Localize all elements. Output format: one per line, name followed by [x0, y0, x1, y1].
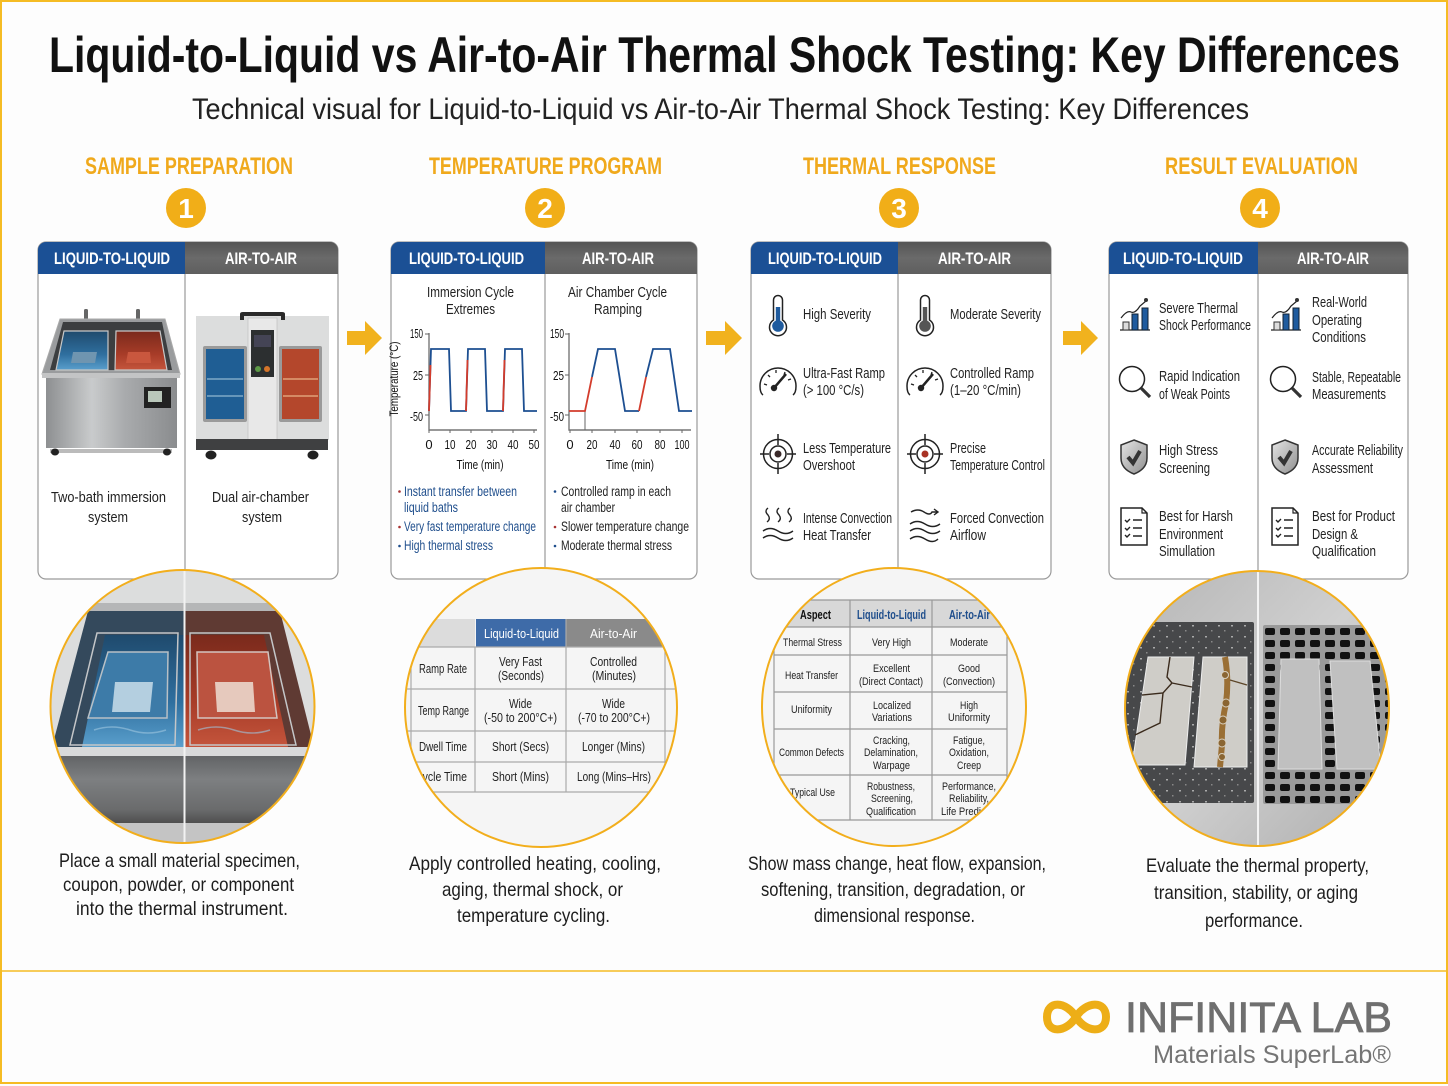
label: precise temperature control: Temperature Control — [950, 458, 1045, 474]
chart title: immersion cycle — [427, 285, 514, 318]
circle: comparison table 2: Screening, — [871, 793, 913, 805]
caption: step 2: aging, thermal shock, or — [442, 879, 623, 901]
chart title: air chamber cycle: Air Chamber Cycle — [568, 285, 667, 301]
label: stable repeatable: Measurements — [1312, 387, 1386, 403]
icon: target overshoot — [760, 434, 796, 474]
label: precise temperature control: Precise — [950, 441, 986, 457]
line chart: air chamber temperature cycle: -50 — [550, 409, 564, 424]
circle: comparison table 1: (-70 to 200°C+) — [578, 711, 650, 725]
label: forced convection — [950, 511, 1044, 544]
header: liquid-to-liquid — [751, 242, 898, 274]
label: real-world operating conditions — [1312, 295, 1367, 346]
circle: comparison table 1: (Seconds) — [498, 669, 544, 683]
header: air-to-air: AIR-TO-AIR — [1297, 250, 1369, 268]
caption: step 1: coupon, powder, or component — [63, 874, 295, 896]
circle: comparison table 2: Typical Use — [790, 787, 835, 799]
label: intense convection: Heat Transfer — [803, 528, 871, 544]
line chart: immersion temperature cycle: 20 — [466, 437, 476, 452]
label: high stress screening — [1159, 443, 1218, 477]
step 1 number badge: 1 — [178, 193, 194, 224]
header: liquid-to-liquid — [38, 242, 185, 274]
label: harsh environment: Environment — [1159, 527, 1223, 543]
step 4 number badge: 4 — [1252, 193, 1268, 224]
line chart: air chamber temperature cycle: 60 — [632, 437, 642, 452]
header: air-to-air — [545, 242, 697, 274]
arrow: step 2 to 3 — [706, 321, 742, 355]
label: ultra-fast ramp: (> 100 °C/s) — [803, 383, 864, 399]
bullets: air-to-air — [554, 484, 689, 553]
caption: step 4: transition, stability, or aging — [1154, 882, 1358, 904]
icon: checklist — [1272, 508, 1298, 545]
line chart: immersion temperature cycle: 40 — [508, 437, 518, 452]
circle: comparison table 1: Wide — [602, 697, 625, 711]
label: moderate severity: Moderate Severity — [950, 307, 1042, 323]
machine captions: Two-bath immersion — [51, 490, 166, 506]
step 4 heading: RESULT EVALUATION — [1165, 153, 1358, 180]
icon: target precise — [907, 434, 943, 474]
label: severe thermal shock performance — [1159, 301, 1251, 334]
caption: step 1: Place a small material specimen, — [59, 850, 300, 872]
line chart: immersion temperature cycle: 150 — [410, 326, 423, 341]
caption: step 4: Evaluate the thermal property, — [1146, 855, 1369, 877]
caption: step 4 — [1146, 855, 1369, 932]
circle: comparison table 2: Moderate — [950, 637, 988, 649]
label: accurate reliability: Assessment — [1312, 461, 1373, 477]
icon: gauge controlled — [907, 368, 943, 395]
step 1 number badge — [166, 188, 206, 228]
line chart: air chamber temperature cycle: 20 — [586, 437, 598, 452]
step 3 heading: THERMAL RESPONSE — [803, 153, 996, 180]
circle: comparison table 1: Liquid-to-Liquid — [484, 627, 559, 641]
circle: comparison table 2: Fatigue, — [953, 735, 985, 747]
circle: comparison table 2: Reliability, — [949, 793, 989, 805]
caption: step 1 — [59, 850, 300, 920]
bullets: liquid-to-liquid — [398, 484, 536, 553]
line chart: immersion temperature cycle: 30 — [486, 437, 498, 452]
line chart: air chamber temperature cycle: 80 — [654, 437, 666, 452]
circle: comparison table 2: Common Defects — [779, 747, 844, 759]
label: forced convection: Forced Convection — [950, 511, 1044, 527]
icon: shield — [1121, 440, 1147, 474]
bullets: air-to-air: Moderate thermal stress — [561, 538, 672, 553]
step 2 number badge — [525, 188, 565, 228]
line chart: air chamber temperature cycle: Time (min) — [606, 457, 654, 472]
line chart: immersion temperature cycle — [387, 326, 540, 472]
icon: performance chart — [1120, 298, 1150, 330]
label: ultra-fast ramp: Ultra-Fast Ramp — [803, 366, 885, 382]
icon: magnifier — [1270, 366, 1301, 397]
label: real-world operating conditions: Conditions — [1312, 330, 1366, 346]
icon: forced airflow — [910, 509, 940, 542]
label: harsh environment: Best for Harsh — [1159, 509, 1233, 525]
label: accurate reliability — [1312, 443, 1404, 477]
icon: thermometer moderate — [916, 296, 934, 336]
label: less temperature overshoot — [803, 441, 891, 474]
header: air-to-air: AIR-TO-AIR — [225, 250, 297, 268]
panel: temperature program — [387, 242, 697, 579]
line chart: immersion temperature cycle: -50 — [410, 409, 423, 424]
circle: comparison table 1: (Minutes) — [592, 669, 636, 683]
label: real-world operating conditions: Real-World — [1312, 295, 1367, 311]
line chart: immersion temperature cycle: 25 — [413, 368, 423, 383]
circle: comparison table 1: Controlled — [590, 655, 637, 669]
circle: comparison table 2: Warpage — [873, 760, 910, 772]
step 1 heading: SAMPLE PREPARATION — [85, 153, 293, 180]
label: high stress screening: Screening — [1159, 461, 1210, 477]
step 3 number badge: 3 — [891, 193, 907, 224]
icon: gauge fast — [760, 368, 796, 395]
panel: result evaluation — [1109, 242, 1408, 579]
circle: comparison table 2: Oxidation, — [949, 747, 989, 759]
label: product design: Best for Product — [1312, 509, 1395, 525]
bullets: liquid-to-liquid: Instant transfer between — [404, 484, 517, 499]
circle: comparison table 2: Cracking, — [873, 735, 910, 747]
label: rapid indication: of Weak Points — [1159, 387, 1230, 403]
step 3 number badge — [879, 188, 919, 228]
circle: comparison table 2: Robustness, — [867, 781, 915, 793]
icon: infinity symbol — [1047, 1005, 1106, 1029]
line chart: air chamber temperature cycle: 40 — [610, 437, 620, 452]
label: controlled ramp — [950, 366, 1034, 399]
circle: comparison table 2: Heat Transfer — [785, 670, 838, 682]
circle: comparison table 1: Dwell Time — [419, 740, 467, 754]
bullets: air-to-air: Controlled ramp in each — [561, 484, 671, 499]
label: product design: Design & — [1312, 527, 1358, 543]
arrow: step 1 to 2 — [347, 321, 382, 355]
circle: comparison table 2: Aspect — [800, 608, 832, 622]
line chart: air chamber temperature cycle: 25 — [553, 368, 564, 383]
circle: comparison table 2: Thermal Stress — [783, 637, 842, 649]
line chart: air chamber temperature cycle — [550, 326, 692, 472]
dual air-chamber machine — [196, 312, 329, 460]
icon: checklist — [1121, 508, 1147, 545]
circle: comparison table 2: Localized — [873, 700, 911, 712]
caption: step 2 — [409, 853, 661, 927]
header: air-to-air — [898, 242, 1051, 274]
circle: comparison table 1: Long (Mins–Hrs) — [577, 770, 651, 784]
line chart: immersion temperature cycle: 50 — [528, 437, 540, 452]
caption: step 4: performance. — [1205, 910, 1303, 932]
icon: thermometer high — [770, 296, 786, 336]
header: liquid-to-liquid — [391, 242, 545, 274]
logo: infinita lab — [1047, 994, 1392, 1069]
circle: comparison table 1: Very Fast — [499, 655, 542, 669]
label: stable repeatable: Stable, Repeatable — [1312, 370, 1401, 386]
label: high severity: High Severity — [803, 307, 872, 323]
label: harsh environment: Simullation — [1159, 544, 1215, 560]
line chart: immersion temperature cycle: Temperature (°C) — [387, 341, 401, 416]
label: less temperature overshoot: Less Temperature — [803, 441, 891, 457]
circle: comparison table 2: (Direct Contact) — [859, 676, 923, 688]
header: liquid-to-liquid: LIQUID-TO-LIQUID — [409, 250, 524, 268]
icon: shield — [1272, 440, 1298, 474]
panel: sample preparation — [38, 242, 338, 579]
circle: comparison table 2: Qualification — [866, 806, 916, 818]
bullets: liquid-to-liquid: High thermal stress — [404, 538, 493, 553]
chart title: air chamber cycle: Ramping — [594, 302, 642, 318]
circle: comparison table 2: Life Prediction — [941, 806, 1001, 818]
arrow: step 3 to 4 — [1063, 321, 1098, 355]
header: air-to-air: AIR-TO-AIR — [582, 250, 654, 268]
caption: step 2: temperature cycling. — [457, 905, 610, 927]
bullets: liquid-to-liquid: Very fast temperature change — [404, 519, 536, 534]
circle: comparison table 2: Uniformity — [791, 704, 832, 716]
chart title: air chamber cycle — [568, 285, 667, 318]
chart title: immersion cycle: Immersion Cycle — [427, 285, 514, 301]
panel: thermal response — [751, 242, 1051, 579]
header: air-to-air: AIR-TO-AIR — [938, 250, 1011, 268]
line chart: air chamber temperature cycle: 150 — [550, 326, 564, 341]
label: rapid indication: Rapid Indication — [1159, 369, 1240, 385]
header: air-to-air — [1258, 242, 1408, 274]
caption: step 3: dimensional response. — [814, 905, 975, 927]
caption: step 3 — [748, 853, 1046, 927]
label: product design — [1312, 509, 1395, 560]
circle: comparison table 1: Short (Mins) — [492, 770, 549, 784]
circle: comparison table 2: Liquid-to-Liquid — [857, 608, 926, 622]
circle: comparison table 2: Uniformity — [948, 712, 990, 724]
header: liquid-to-liquid: LIQUID-TO-LIQUID — [1123, 250, 1243, 268]
bullets: liquid-to-liquid: liquid baths — [404, 500, 458, 515]
label: intense convection: Intense Convection — [803, 511, 892, 527]
label: precise temperature control — [950, 441, 1045, 474]
label: intense convection — [803, 511, 892, 544]
step 4 number badge — [1240, 188, 1280, 228]
label: harsh environment — [1159, 509, 1233, 560]
bullets: air-to-air: Slower temperature change — [561, 519, 689, 534]
circle: comparison table 1: Short (Secs) — [492, 740, 549, 754]
label: controlled ramp: Controlled Ramp — [950, 366, 1034, 382]
header: liquid-to-liquid: LIQUID-TO-LIQUID — [768, 250, 882, 268]
label: real-world operating conditions: Operating — [1312, 313, 1362, 329]
line chart: immersion temperature cycle: 0 — [425, 437, 433, 452]
machine captions — [51, 490, 309, 526]
line chart: air chamber temperature cycle: 100 — [674, 437, 690, 452]
circle: comparison table 2: Good — [958, 663, 980, 675]
label: controlled ramp: (1–20 °C/min) — [950, 383, 1021, 399]
caption: step 2: Apply controlled heating, cooling, — [409, 853, 661, 875]
label: forced convection: Airflow — [950, 528, 986, 544]
circle: comparison table 1: Wide — [509, 697, 532, 711]
circle: comparison table 1: (-50 to 200°C+) — [484, 711, 557, 725]
label: less temperature overshoot: Overshoot — [803, 458, 855, 474]
icon: heat waves — [763, 508, 793, 540]
machine captions: system — [242, 510, 282, 526]
circle: comparison table 1: Temp Range — [418, 704, 469, 718]
step 2 heading: TEMPERATURE PROGRAM — [429, 153, 662, 180]
caption: step 3: Show mass change, heat flow, expansion, — [748, 853, 1046, 875]
circle: comparison table 1: Air-to-Air — [590, 627, 637, 641]
logo: infinita lab: Materials SuperLab® — [1153, 1041, 1392, 1069]
circle: comparison table 1: Ramp Rate — [419, 662, 467, 676]
circle: comparison table 1: Cycle Time — [415, 770, 467, 784]
line chart: air chamber temperature cycle: 0 — [566, 437, 574, 452]
label: severe thermal shock performance: Shock Performance — [1159, 318, 1251, 334]
step 2 number badge: 2 — [537, 193, 553, 224]
header: air-to-air — [185, 242, 338, 274]
line chart: immersion temperature cycle: 10 — [444, 437, 456, 452]
label: stable repeatable — [1312, 370, 1401, 403]
icon: magnifier — [1120, 366, 1150, 397]
circle: baths close-up — [40, 570, 330, 845]
label: accurate reliability: Accurate Reliability — [1312, 443, 1404, 459]
header: liquid-to-liquid — [1109, 242, 1258, 274]
header: liquid-to-liquid: LIQUID-TO-LIQUID — [54, 250, 170, 268]
logo: infinita lab: INFINITA LAB — [1125, 994, 1392, 1042]
caption: step 1: into the thermal instrument. — [76, 898, 288, 920]
circle: comparison table 2: Creep — [957, 760, 981, 772]
label: high stress screening: High Stress — [1159, 443, 1218, 459]
circle: comparison table 2: High — [960, 700, 978, 712]
line chart: immersion temperature cycle: Time (min) — [456, 457, 504, 472]
label: product design: Qualification — [1312, 544, 1376, 560]
circle: comparison table 2 — [762, 568, 1030, 846]
circle: specimen results — [1120, 570, 1393, 850]
circle: comparison table 1: Longer (Mins) — [582, 740, 645, 754]
bullets: air-to-air: air chamber — [561, 500, 615, 515]
caption: step 3: softening, transition, degradation, or — [761, 879, 1025, 901]
label: rapid indication — [1159, 369, 1240, 403]
label: severe thermal shock performance: Severe Thermal — [1159, 301, 1238, 317]
two-bath immersion machine — [42, 309, 180, 456]
circle: comparison table 2: Air-to-Air — [949, 608, 990, 622]
circle: comparison table 2: Delamination, — [864, 747, 918, 759]
circle: comparison table 1 — [400, 568, 681, 847]
subtitle: Technical visual for Liquid-to-Liquid vs Air-to-Air Thermal Shock Testing: Key Differences — [192, 93, 1249, 126]
circle: comparison table 2: Very High — [872, 637, 911, 649]
circle: comparison table 2: (Convection) — [943, 676, 995, 688]
chart title: immersion cycle: Extremes — [446, 302, 495, 318]
circle: comparison table 2: Excellent — [873, 663, 910, 675]
circle: comparison table 2: Variations — [872, 712, 912, 724]
machine captions: system — [88, 510, 128, 526]
label: ultra-fast ramp — [803, 366, 885, 399]
circle: comparison table 2: Performance, — [942, 781, 996, 793]
machine captions: Dual air-chamber — [212, 490, 309, 506]
icon: performance chart — [1271, 298, 1301, 330]
